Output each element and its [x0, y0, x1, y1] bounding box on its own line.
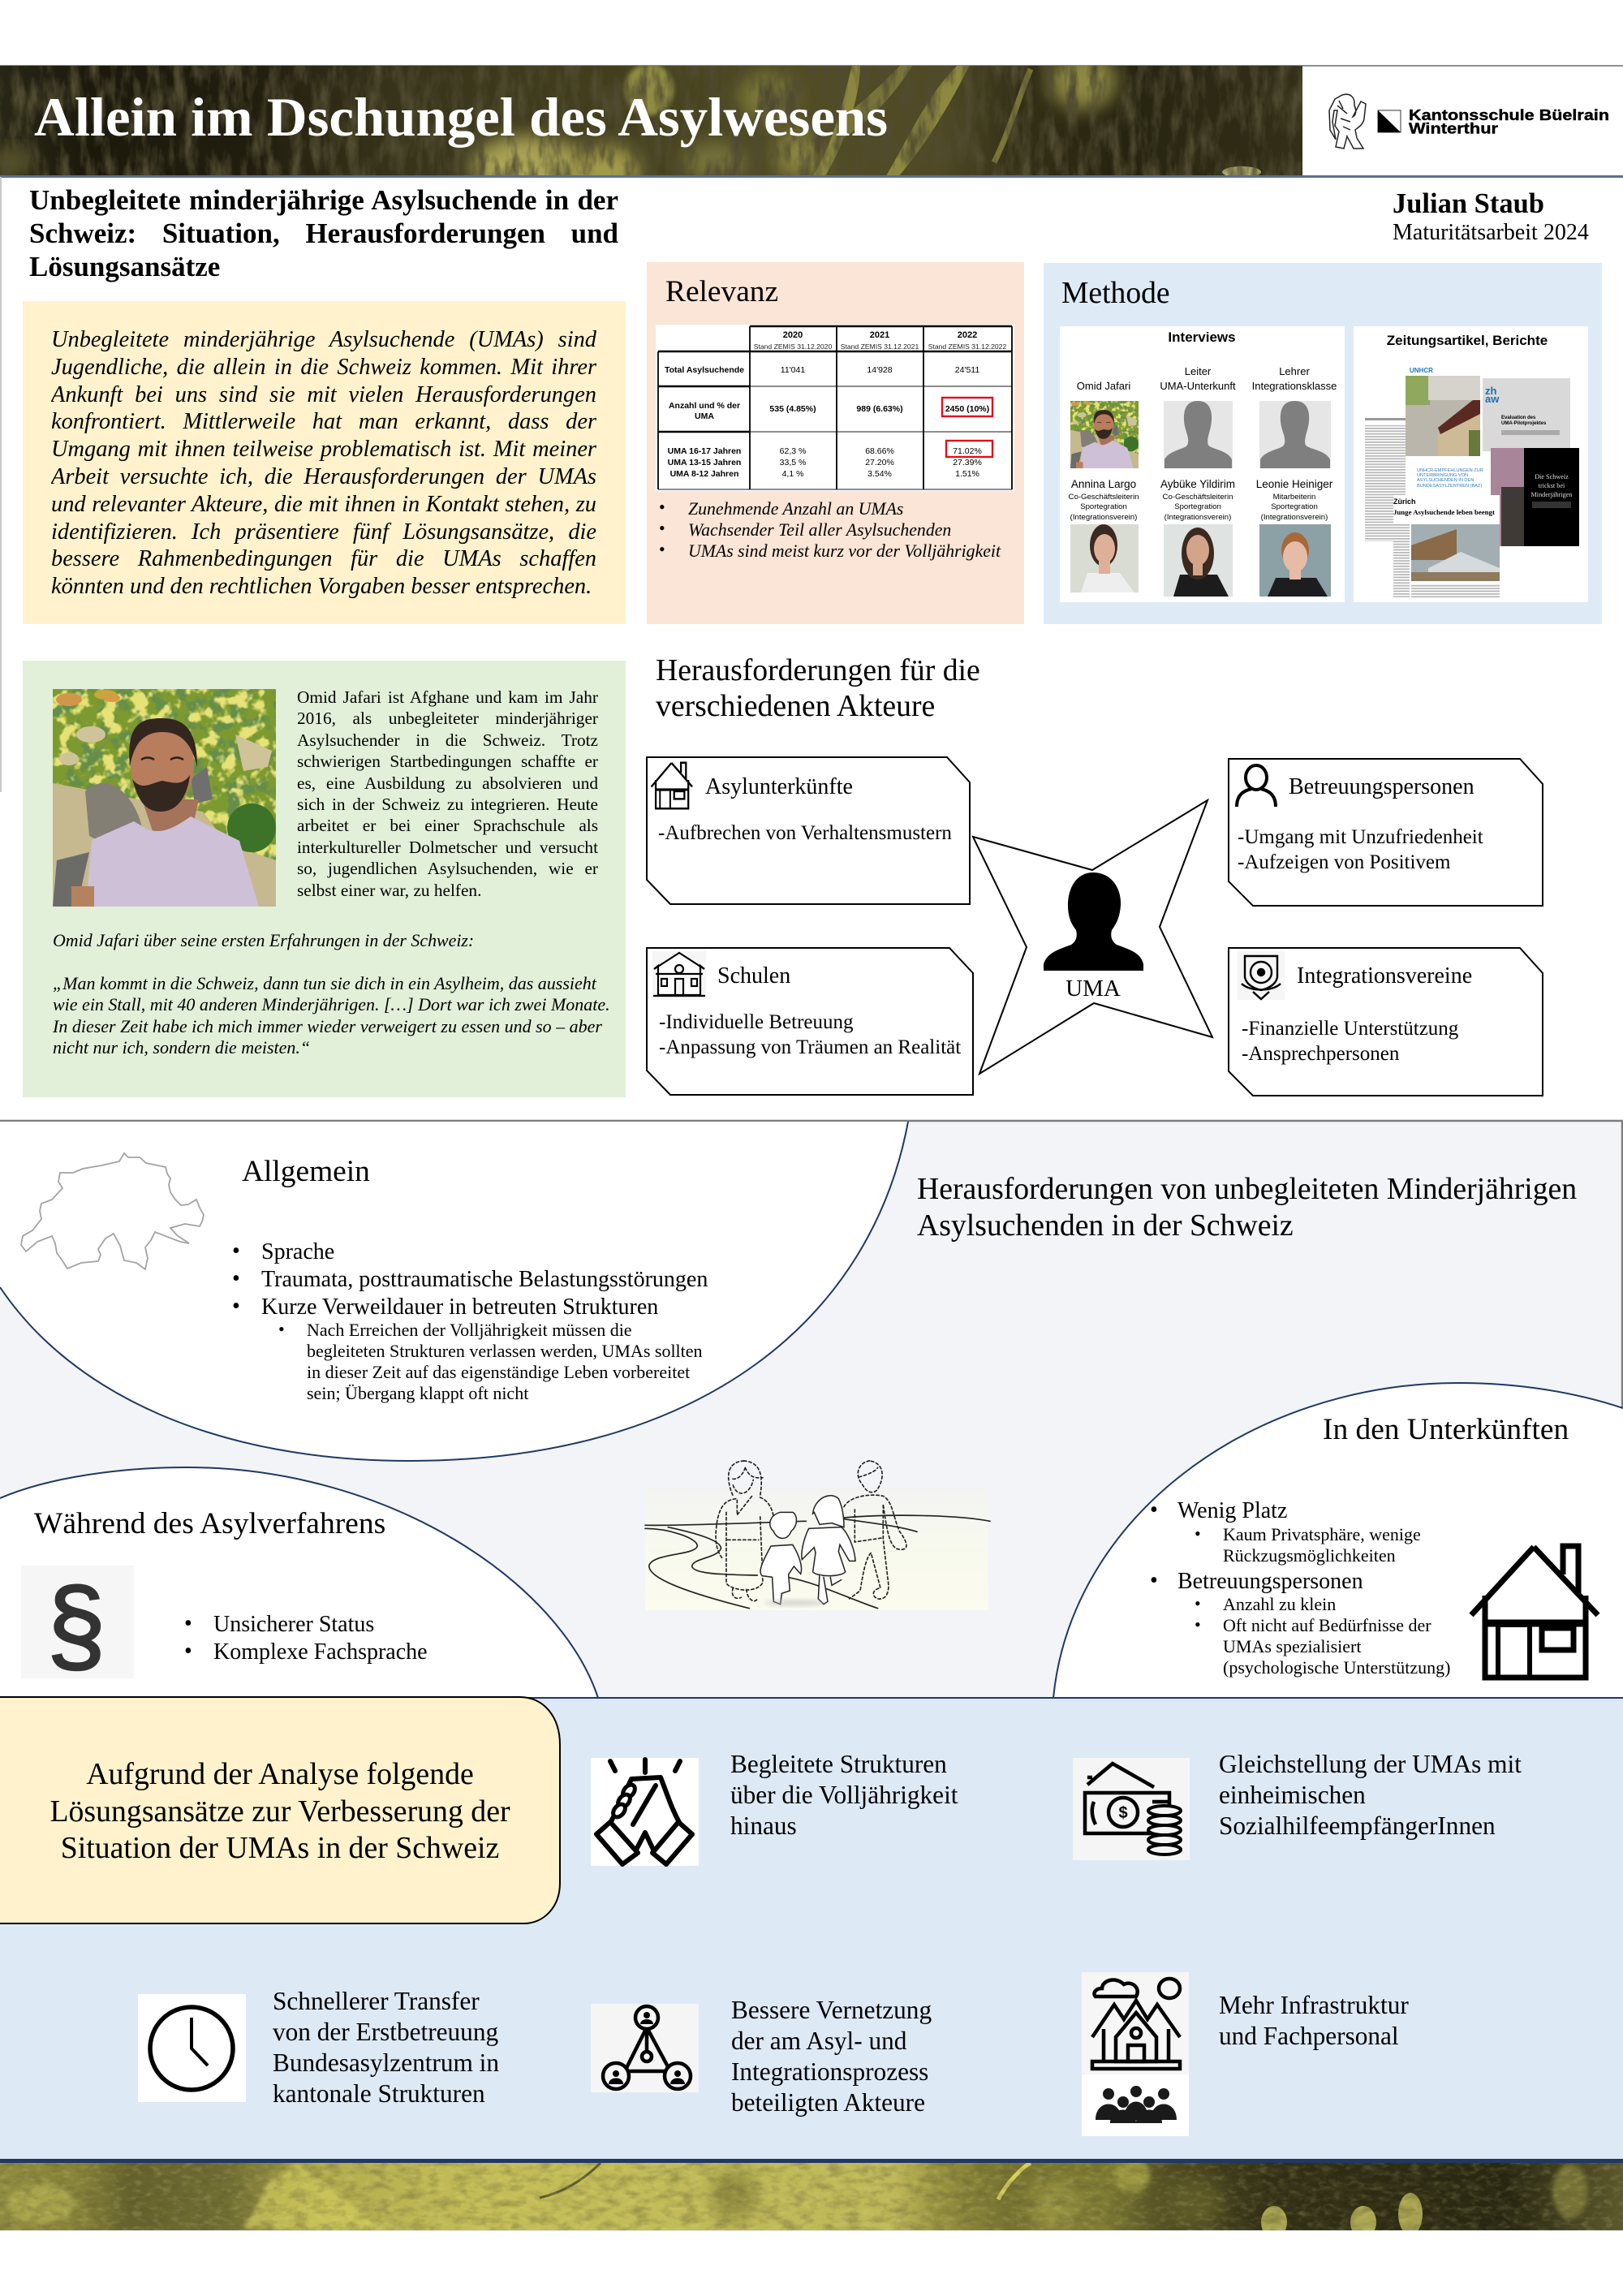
photo — [53, 689, 276, 907]
data table: UMA 8-12 Jahren — [670, 469, 738, 479]
box: solutions intro — [0, 1697, 560, 1923]
icon: handshake — [591, 1758, 699, 1866]
data table: Stand ZEMIS 31.12.2022 — [928, 342, 1006, 351]
solution: structures beyond adulthood: über die Volljährigkeit — [730, 1781, 958, 1809]
data table: UMA — [695, 411, 714, 421]
solution: structures beyond adulthood — [591, 1750, 958, 1866]
sub bullet: begleiteten Strukturen verlassen werden, UMAs sollten — [307, 1341, 703, 1361]
bullet list: • — [232, 1294, 240, 1319]
subtitle: Schweiz: Situation, Herausforderungen und — [29, 218, 618, 249]
magazine cover — [1491, 448, 1579, 546]
callout: Integrationsvereine: -Ansprechpersonen — [1242, 1043, 1400, 1065]
data table: Anzahl und % der — [669, 401, 740, 411]
subtitle: Unbegleitete minderjährige Asylsuchende in der — [29, 184, 618, 216]
UNHCR report: ASYLSUCHENDEN IN DEN — [1417, 478, 1474, 483]
bubble: In den Unterkünften: • — [1195, 1614, 1201, 1635]
bubble: In den Unterkünften: Oft nicht auf Bedürfnisse der — [1223, 1615, 1431, 1635]
bullet list — [184, 1611, 428, 1665]
biography: so, jugendlichen Asylsuchenden, wie er — [297, 859, 598, 878]
reports card — [1354, 326, 1588, 602]
solution: equal treatment: SozialhilfeempfängerInnen — [1219, 1811, 1496, 1840]
callout: Integrationsvereine: Integrationsvereine — [1297, 963, 1472, 989]
bullet list: Traumata, posttraumatische Belastungsstörungen — [261, 1267, 708, 1292]
star shape — [973, 800, 1212, 1074]
school logo: Winterthur — [1409, 120, 1498, 136]
biography — [297, 687, 598, 910]
ZHAW report: Evaluation des — [1501, 416, 1536, 420]
biography: es, eine Ausbildung zu absolvieren und — [297, 773, 598, 793]
bullet list — [1150, 1497, 1363, 1594]
bubble: In den Unterkünften: In den Unterkünften — [1323, 1413, 1569, 1446]
interviews card: (Integrationsverein) — [1070, 513, 1137, 522]
interviews card: Aybüke Yildirim — [1160, 478, 1235, 490]
data table: 2020 — [783, 330, 803, 340]
solution: faster transfer: Schnellerer Transfer — [273, 1987, 480, 2015]
callout: Betreuungspersonen — [1229, 759, 1543, 906]
intro text — [51, 326, 596, 606]
solution: equal treatment: Gleichstellung der UMAs mit — [1219, 1750, 1522, 1778]
bubble: In den Unterkünften: • — [1195, 1523, 1201, 1544]
biography: schwierigen Startbedingungen schaffte er — [297, 752, 598, 771]
header banner — [0, 65, 1623, 178]
key points: Wachsender Teil aller Asylsuchenden — [688, 520, 951, 540]
bubble: In den Unterkünften: Rückzugsmöglichkeiten — [1223, 1545, 1396, 1566]
portrait: Omid Jafari — [1070, 401, 1139, 468]
magazine cover: Minderjährigen — [1531, 491, 1572, 498]
intro text: Arbeit versuchte ich, die Herausforderungen der UMAs — [51, 464, 596, 489]
solution: faster transfer: Bundesasylzentrum in — [273, 2048, 499, 2077]
intro text: Jugendliche, die allein in die Schweiz kommen. Mit ihrer — [51, 355, 596, 380]
interviews card: Sportegration — [1271, 502, 1318, 511]
data table: 14'928 — [867, 365, 893, 375]
bubble: Während des Asylverfahrens: Während des Asylverfahrens — [34, 1507, 385, 1540]
illustration: family on a path — [645, 1461, 990, 1610]
bubble: In den Unterkünften: Kaum Privatsphäre, wenige — [1223, 1524, 1421, 1544]
solution: equal treatment: einheimischen — [1219, 1781, 1366, 1809]
box: solutions intro: Aufgrund der Analyse folgende — [86, 1757, 474, 1791]
bubble: Während des Asylverfahrens — [0, 1467, 598, 1698]
icon: person — [1237, 765, 1276, 807]
icon: Switzerland outline — [21, 1153, 204, 1269]
solution: better networking: beteiligten Akteure — [731, 2088, 925, 2117]
sub bullet: sein; Übergang klappt oft nicht — [307, 1383, 528, 1403]
solution: structures beyond adulthood: hinaus — [730, 1811, 797, 1840]
solution: more infrastructure: und Fachpersonal — [1219, 2022, 1399, 2050]
bullet list: Kurze Verweildauer in betreuten Strukturen — [261, 1294, 658, 1320]
intro text: könnten und den rechtlichen Vorgaben besser entsprechen. — [51, 574, 592, 599]
interviews card: Sportegration — [1174, 502, 1221, 511]
ZHAW report — [1483, 378, 1570, 451]
bubble: Allgemein — [0, 1122, 908, 1461]
heading: Herausforderungen von unbegleiteten Minderjährigen — [917, 1172, 1577, 1206]
bubble: In den Unterkünften: Anzahl zu klein — [1223, 1594, 1336, 1614]
key points — [659, 498, 1001, 561]
icon: money — [1073, 1758, 1190, 1860]
solution: more infrastructure — [1082, 1972, 1409, 2136]
sub bullet: • — [278, 1319, 285, 1339]
data table: 71.02% — [953, 446, 982, 456]
heading: Relevanz — [665, 275, 778, 308]
quote: wie ein Stall, mit 40 anderen Minderjährigen. […] Dort war ich zwei Monate. — [53, 994, 610, 1014]
bubble: In den Unterkünften: UMAs spezialisiert — [1223, 1636, 1361, 1656]
magazine cover: trickst bei — [1539, 482, 1565, 489]
bullet list: Unsicherer Status — [213, 1612, 374, 1637]
intro text: bessere Rahmenbedingungen für die UMAs schaffen — [51, 546, 596, 571]
bullet list: • — [1150, 1568, 1158, 1593]
heading: Herausforderungen für die — [656, 653, 980, 687]
intro text: Umgang mit ihnen teilweise problematisch ist. Mit meiner — [51, 437, 596, 462]
interviews card: Annina Largo — [1071, 478, 1136, 490]
lion emblem — [1329, 94, 1366, 149]
interviews card: Omid Jafari — [1077, 380, 1130, 392]
icon: money: $ — [1118, 1804, 1128, 1822]
intro text: Ankunft bei uns sind sie mit vielen Herausforderungen — [51, 382, 596, 407]
callout: Asylunterkünfte — [647, 757, 970, 904]
icon: club badge — [1238, 951, 1285, 1000]
biography: Omid Jafari ist Afghane und kam im Jahr — [297, 687, 598, 707]
panel: challenges — [0, 1120, 1623, 1698]
heading: Asylsuchenden in der Schweiz — [917, 1208, 1294, 1243]
article column — [1365, 418, 1406, 541]
solution: better networking — [591, 1996, 932, 2117]
data table: Stand ZEMIS 31.12.2020 — [754, 342, 832, 351]
solution: better networking: Bessere Vernetzung — [731, 1996, 932, 2024]
heading: Methode — [1061, 277, 1170, 310]
data table: 62,3 % — [780, 446, 806, 456]
ZHAW report: zh — [1485, 385, 1496, 397]
interviews card: Integrationsklasse — [1252, 380, 1337, 392]
biography: sich in der Schweiz zu integrieren. Heute — [297, 795, 598, 814]
intro text: identifizieren. Ich präsentiere fünf Lösungsansätze, die — [51, 519, 596, 545]
data table — [656, 325, 1014, 491]
icon: school — [652, 951, 706, 1000]
callout: Schulen: Schulen — [717, 963, 790, 989]
interviews card: Leonie Heiniger — [1256, 478, 1333, 490]
portrait: Leonie Heiniger — [1259, 524, 1331, 597]
box: solutions intro: Lösungsansätze zur Verbesserung der — [50, 1794, 510, 1829]
data table: 2022 — [958, 330, 977, 340]
panel: solutions — [0, 1697, 1623, 2160]
data table: 989 (6.63%) — [856, 404, 903, 414]
callout: Asylunterkünfte: -Aufbrechen von Verhaltensmustern — [658, 822, 952, 844]
solution: faster transfer — [138, 1987, 499, 2108]
interviews card: Sportegration — [1080, 502, 1127, 511]
data table: 68.66% — [865, 446, 894, 456]
bullet list: • — [184, 1639, 192, 1664]
ZHAW report: UMA-Pilotprojektes — [1501, 421, 1547, 426]
solution: better networking: der am Asyl- und — [731, 2027, 907, 2055]
interviews card: (Integrationsverein) — [1165, 513, 1231, 522]
callout: Schulen: -Anpassung von Träumen an Realität — [659, 1036, 961, 1058]
intro text: Unbegleitete minderjährige Asylsuchende (UMAs) sind — [51, 327, 596, 352]
interviews card: Lehrer — [1279, 365, 1310, 377]
heading — [917, 1172, 1577, 1243]
solution: structures beyond adulthood: Begleitete Strukturen — [730, 1750, 947, 1778]
UNHCR report — [1406, 363, 1483, 493]
portrait: Annina Largo — [1070, 524, 1139, 592]
solution: faster transfer: von der Erstbetreuung — [273, 2018, 498, 2046]
jungle image — [0, 66, 1302, 175]
panel: introduction — [23, 301, 626, 624]
bullet list: Sprache — [261, 1239, 334, 1264]
data table: 2450 (10%) — [945, 404, 989, 414]
callout: Integrationsvereine: -Finanzielle Unterstützung — [1242, 1018, 1459, 1040]
icon: house — [1471, 1546, 1598, 1678]
footer banner — [0, 2159, 1623, 2231]
school name: Kantonsschule Büelrain — [1409, 106, 1609, 123]
bullet list — [232, 1238, 708, 1320]
interviews card: Co-Geschäftsleiterin — [1069, 493, 1139, 502]
UNHCR report: UNTERBRINGUNG VON — [1417, 473, 1468, 478]
data table: 3.54% — [867, 469, 892, 479]
interviews card: Leiter — [1185, 365, 1212, 377]
key points: • — [659, 519, 665, 538]
UMA silhouette — [1044, 872, 1143, 971]
author: Maturitätsarbeit 2024 — [1393, 220, 1589, 245]
biography: selbst einer war, zu helfen. — [297, 881, 481, 900]
panel: Omid Jafari portrait — [23, 661, 626, 1097]
callout: Betreuungspersonen: Betreuungspersonen — [1289, 774, 1474, 799]
UMA label: UMA — [1065, 976, 1121, 1002]
author — [1393, 188, 1589, 245]
biography: interkultureller Dolmetscher und versucht — [297, 838, 598, 857]
icon: house — [652, 763, 692, 808]
panel: Relevanz — [647, 262, 1024, 624]
UNHCR report: UNHCR — [1410, 367, 1433, 374]
callout: Betreuungspersonen: -Aufzeigen von Positivem — [1238, 851, 1451, 873]
data table: Stand ZEMIS 31.12.2021 — [841, 342, 919, 351]
bullet list: • — [1150, 1497, 1158, 1523]
data table: 27.39% — [953, 458, 982, 467]
interviews card: UMA-Unterkunft — [1160, 380, 1236, 392]
bullet list: Komplexe Fachsprache — [213, 1639, 428, 1665]
key points: • — [659, 498, 665, 517]
sub bullet: Nach Erreichen der Volljährigkeit müssen die — [307, 1320, 632, 1340]
interviews card: Mitarbeiterin — [1273, 493, 1315, 502]
data table: 24'511 — [955, 365, 979, 375]
intro text: konfrontiert. Mittlerweile hat man erkannt, dass der — [51, 409, 596, 434]
solution: more infrastructure: Mehr Infrastruktur — [1219, 1991, 1409, 2019]
key points: Zunehmende Anzahl an UMAs — [688, 499, 903, 519]
data table: 535 (4.85%) — [769, 404, 816, 414]
interviews card: Interviews — [1168, 330, 1236, 345]
bullet list: • — [184, 1611, 192, 1636]
magazine cover: Die Schweiz — [1535, 473, 1569, 480]
zurich shield — [1378, 110, 1401, 132]
sub bullet — [278, 1319, 703, 1403]
icon: paragraph sign: § — [47, 1566, 105, 1684]
data table: 11'041 — [781, 365, 805, 375]
data table: UMA 16-17 Jahren — [668, 446, 741, 456]
bubble: In den Unterkünften: • — [1195, 1593, 1201, 1613]
UNHCR report: UNHCR-EMPFEHLUNGEN ZUR — [1417, 468, 1483, 473]
bullet list: • — [232, 1238, 240, 1264]
data table: UMA 13-15 Jahren — [668, 458, 741, 467]
heading — [656, 653, 980, 723]
interviews card — [1060, 326, 1345, 602]
placeholder portraits — [1164, 401, 1331, 468]
subtitle — [29, 183, 618, 289]
ZHAW report: aw — [1485, 393, 1500, 405]
key points: UMAs sind meist kurz vor der Volljährigkeit — [688, 541, 1001, 561]
UNHCR report: BUNDESASYLZENTREN (BAZ) — [1417, 484, 1482, 489]
biography: 2016, als unbegleiteter minderjähriger — [297, 709, 598, 728]
data table: Total Asylsuchende — [665, 365, 744, 375]
icon: house and people — [1082, 1972, 1189, 2136]
data table: 33,5 % — [780, 458, 806, 467]
bullet list: • — [232, 1266, 240, 1291]
solution: faster transfer: kantonale Strukturen — [273, 2079, 485, 2108]
data table: 27.20% — [865, 458, 894, 467]
sub bullet: in dieser Zeit auf das eigenständige Leben vorbereitet — [307, 1362, 690, 1382]
panel: Methode — [1044, 263, 1602, 624]
biography: Asylsuchender in die Schweiz. Trotz — [297, 730, 598, 750]
portrait: Aybüke Yildirim — [1164, 524, 1233, 597]
bubble: In den Unterkünften: (psychologische Unterstützung) — [1223, 1657, 1450, 1678]
biography: arbeitet er bei einer Sprachschule als — [297, 816, 598, 835]
quote — [52, 973, 610, 1058]
bubble: Allgemein: Allgemein — [242, 1155, 370, 1188]
school logo — [1329, 94, 1609, 149]
newspaper page — [1393, 495, 1500, 599]
quote: nicht nur ich, sondern die meisten.“ — [53, 1037, 310, 1058]
author: Julian Staub — [1393, 188, 1544, 219]
solution: equal treatment — [1073, 1750, 1522, 1860]
data table: 1.51% — [955, 469, 979, 479]
data table: 4,1 % — [782, 469, 803, 479]
subtitle: Lösungsansätze — [29, 251, 220, 282]
bubble: In den Unterkünften — [1053, 1383, 1623, 1698]
icon: clock — [138, 1994, 246, 2102]
quote intro: Omid Jafari über seine ersten Erfahrungen in der Schweiz: — [53, 930, 474, 950]
callout: Betreuungspersonen: -Umgang mit Unzufriedenheit — [1238, 826, 1483, 848]
callout: Asylunterkünfte: Asylunterkünfte — [705, 774, 853, 799]
data table: 2021 — [870, 330, 889, 340]
heading: verschiedenen Akteure — [656, 689, 935, 723]
key points: • — [659, 540, 665, 559]
bullet list: Betreuungspersonen — [1177, 1569, 1363, 1594]
callout: Integrationsvereine — [1229, 948, 1543, 1096]
newspaper page: Junge Asylsuchende leben beengt — [1393, 508, 1495, 516]
callout: Schulen — [647, 948, 973, 1095]
bullet list: Wenig Platz — [1177, 1498, 1287, 1523]
icon: paragraph sign — [21, 1566, 134, 1684]
section: actors — [647, 653, 1543, 1096]
interviews card: (Integrationsverein) — [1261, 513, 1328, 522]
newspaper page: Zürich — [1393, 498, 1416, 506]
intro text: und relevanter Akteure, die mit ihnen in Kontakt stehen, zu — [51, 492, 596, 517]
interviews card: Co-Geschäftsleiterin — [1163, 493, 1233, 502]
quote: In dieser Zeit habe ich mich immer wieder verweigert zu essen und so – aber — [52, 1016, 602, 1036]
reports card: Zeitungsartikel, Berichte — [1387, 333, 1548, 348]
icon: network — [591, 2004, 699, 2092]
callout: Schulen: -Individuelle Betreuung — [659, 1011, 854, 1033]
quote: „Man kommt in die Schweiz, dann tun sie dich in ein Asylheim, das aussieht — [53, 973, 597, 993]
solution: better networking: Integrationsprozess — [731, 2057, 928, 2086]
title: Allein im Dschungel des Asylwesens — [34, 86, 888, 148]
box: solutions intro: Situation der UMAs in der Schweiz — [61, 1831, 499, 1865]
